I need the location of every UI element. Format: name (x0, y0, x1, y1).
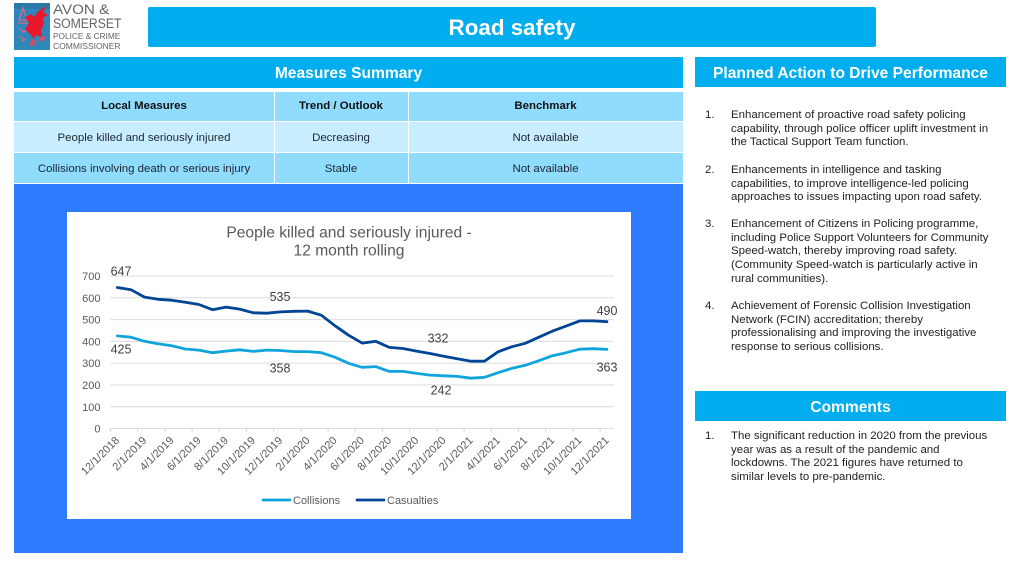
heading: comments: Comments (810, 399, 891, 416)
table row: people killed and seriously injured (14, 122, 683, 152)
x axis date labels: 4/1/2020 (301, 435, 340, 473)
chart title (226, 224, 472, 260)
action 4: Network (FCIN) accreditation; thereby (731, 314, 923, 326)
y axis labels (82, 271, 100, 436)
logo: Avon & Somerset Police & Crime Commissioner: AVON & (53, 2, 109, 18)
x axis date labels (79, 435, 612, 478)
y axis labels: 600 (82, 293, 100, 305)
x axis date labels: 4/1/2019 (138, 435, 177, 473)
y axis labels: 500 (82, 314, 100, 326)
heading: comments (695, 391, 1006, 421)
data labels: 535 (270, 290, 290, 304)
action 3: rural communities). (731, 273, 828, 285)
action 1: 1. (705, 109, 715, 121)
table header row: Benchmark (514, 100, 577, 112)
panel: measures summary (14, 57, 683, 553)
chart legend (263, 495, 439, 507)
action 3: Speed-watch, thereby improving road safety. (731, 245, 957, 257)
table header row: Trend / Outlook (299, 100, 383, 112)
text block: comment 1: year was as a result of the pandemic and (731, 444, 940, 456)
x axis date labels: 8/1/2019 (192, 435, 231, 473)
y axis labels: 0 (94, 424, 100, 436)
table row: people killed and seriously injured: Not available (512, 132, 579, 144)
table row: people killed and seriously injured: People killed and seriously injured (58, 132, 230, 144)
action 1: capability, through police officer uplift investment in (731, 123, 988, 135)
data labels: 490 (597, 304, 617, 318)
action 2: 2. (705, 164, 715, 176)
table row: people killed and seriously injured: Decreasing (312, 132, 370, 144)
logo text (53, 2, 122, 50)
heading: measures summary: Measures Summary (275, 65, 422, 82)
title bar (148, 7, 876, 47)
action 1: Enhancement of proactive road safety policing (731, 109, 966, 121)
line: casualties (117, 288, 607, 361)
data labels (111, 264, 617, 398)
heading: measures summary (14, 57, 683, 88)
data labels: 425 (111, 342, 131, 356)
table row: collisions involving death or serious injury: Stable (325, 163, 357, 175)
y axis labels: 300 (82, 358, 100, 370)
y axis labels: 700 (82, 271, 100, 283)
chart legend: Collisions (293, 495, 341, 507)
x axis date labels: 2/1/2020 (274, 435, 313, 473)
y axis labels: 100 (82, 402, 100, 414)
x axis date labels: 12/1/2020 (405, 435, 449, 478)
line: collisions (117, 336, 607, 378)
x axis date labels: 10/1/2021 (541, 435, 585, 478)
text block: comment 1: The significant reduction in 2020 from the previous (731, 430, 987, 442)
table header row: Local Measures (101, 100, 187, 112)
chart legend: Casualties (387, 495, 439, 507)
action 1: the Tactical Support Team function. (731, 136, 909, 148)
action 1 (705, 109, 988, 148)
action 4 (705, 300, 976, 353)
chart title: People killed and seriously injured - (226, 224, 472, 242)
table row: collisions involving death or serious injury: Not available (512, 163, 579, 175)
action 4: Achievement of Forensic Collision Investigation (731, 300, 971, 312)
action 4: 4. (705, 300, 715, 312)
action 2: capabilities, to improve intelligence-led policing (731, 178, 969, 190)
x axis date labels: 12/1/2019 (242, 435, 285, 478)
heading: planned action (695, 57, 1006, 87)
x axis date labels: 6/1/2020 (328, 435, 367, 473)
text block: comment 1: similar levels to pre-pandemic. (731, 471, 885, 483)
x axis date labels: 4/1/2021 (464, 435, 503, 473)
x axis date labels: 12/1/2018 (79, 435, 122, 478)
y axis labels: 200 (82, 380, 100, 392)
x axis date labels: 2/1/2019 (111, 435, 149, 473)
action 3: 3. (705, 218, 715, 230)
x axis date labels: 10/1/2019 (215, 435, 258, 478)
x axis date labels: 6/1/2021 (491, 435, 530, 473)
x axis date labels: 8/1/2021 (519, 435, 557, 473)
data labels: 363 (597, 360, 617, 374)
action 2: Enhancements in intelligence and tasking (731, 164, 941, 176)
table row: collisions involving death or serious injury (14, 153, 683, 183)
action 4: response to serious collisions. (731, 341, 884, 353)
chart title: 12 month rolling (294, 242, 404, 260)
x axis date labels: 10/1/2020 (378, 435, 421, 478)
action 3 (705, 218, 988, 285)
heading: planned action: Planned Action to Drive Performance (713, 65, 988, 82)
action 4: professionalising and improving the investigative (731, 327, 976, 339)
logo: Avon & Somerset Police & Crime Commissioner: POLICE & CRIME (53, 30, 120, 40)
text block: planned actions list (705, 109, 988, 353)
data labels: 332 (428, 332, 448, 346)
logo: Avon & Somerset Police & Crime Commissioner: COMMISSIONER (53, 40, 121, 50)
logo emblem: red dragon on blue shield (14, 3, 50, 50)
y axis labels: 400 (82, 336, 100, 348)
measures table (14, 92, 683, 184)
text block: comment 1 (705, 430, 987, 483)
x axis date labels: 12/1/2021 (569, 435, 612, 478)
action 2: approaches to issues impacting upon road safety. (731, 191, 982, 203)
x axis date labels: 2/1/2021 (437, 435, 476, 473)
action 3: (Community Speed-watch is particularly active in (731, 259, 978, 271)
data labels: 358 (270, 362, 290, 376)
table header row (14, 92, 683, 120)
logo: Avon & Somerset Police & Crime Commissioner: SOMERSET (53, 16, 121, 32)
chart panel (67, 212, 631, 519)
action 3: Enhancement of Citizens in Policing programme, (731, 218, 978, 230)
action 3: including Police Support Volunteers for Community (731, 232, 988, 244)
title bar: Road safety (449, 15, 575, 40)
text block: comment 1: 1. (705, 430, 715, 442)
text block: comment 1: lockdowns. The 2021 figures have returned to (731, 457, 963, 469)
action 2 (705, 164, 982, 203)
logo: Avon & Somerset Police & Crime Commissioner (14, 2, 122, 50)
data labels: 647 (111, 264, 131, 278)
data labels: 242 (431, 384, 451, 398)
table row: collisions involving death or serious injury: Collisions involving death or serious injury (38, 163, 250, 175)
x axis date labels: 8/1/2020 (355, 435, 394, 473)
x axis date labels: 6/1/2019 (165, 435, 204, 473)
